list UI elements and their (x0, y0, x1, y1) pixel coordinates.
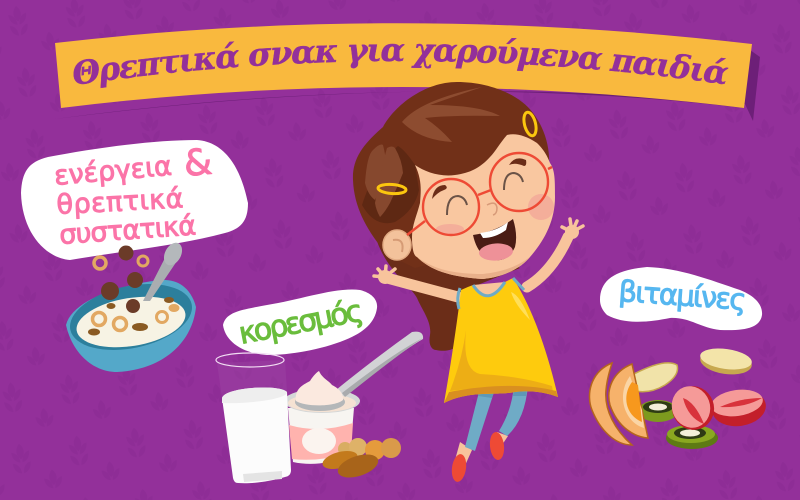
nuts (321, 438, 401, 482)
shoes (450, 431, 505, 483)
bubble text (53, 142, 214, 251)
closed eyes (447, 196, 467, 215)
bubble text: ενέργεια (53, 151, 173, 192)
bubble text: θρεπτικά (56, 183, 184, 221)
whipped cream (296, 371, 343, 405)
yogurt (284, 332, 423, 464)
raised right arm (527, 219, 583, 287)
bubble: energy and nutrients (21, 140, 248, 260)
cheeks (436, 224, 464, 234)
fruit (589, 345, 768, 449)
raised left arm (374, 266, 458, 297)
yellow dress (444, 278, 558, 403)
ear (383, 230, 411, 260)
collar (473, 282, 505, 296)
bubble text: κορεσμός (236, 293, 366, 352)
nose (487, 203, 497, 215)
banner shadow (55, 50, 760, 121)
spoon and handle (336, 332, 423, 396)
cereal in milk (88, 297, 180, 336)
mouth (473, 219, 516, 260)
banner ribbon (55, 23, 752, 108)
face (407, 134, 555, 279)
cereal bowl (64, 240, 198, 372)
bubble text: & (182, 142, 214, 185)
title: Θρεπτικά σνακ για χαρούμενα παιδιά (74, 38, 728, 88)
banana slices (634, 363, 678, 392)
dress hem (444, 386, 558, 403)
melon slices (589, 363, 632, 445)
legs (455, 385, 528, 470)
girl (353, 82, 583, 483)
hair highlights (402, 87, 500, 142)
bubble text: συστατικά (58, 211, 197, 251)
glasses (407, 153, 552, 235)
milk (73, 290, 189, 354)
glass of milk (216, 353, 291, 483)
hair clips (378, 111, 538, 194)
dress shading (450, 330, 553, 392)
long back hair (375, 230, 520, 351)
yogurt cup (288, 408, 354, 464)
eyebrows (432, 185, 447, 199)
falling cereal (94, 246, 148, 300)
kiwi slices (638, 400, 678, 422)
bubble text: βιταμίνες (618, 274, 748, 317)
hair (353, 82, 549, 268)
bowl body (66, 280, 196, 372)
title banner (55, 23, 760, 121)
spoon in bowl (143, 252, 179, 301)
bubble: vitamins (600, 267, 762, 330)
strawberries (710, 386, 768, 430)
bubble: satiety (223, 290, 377, 355)
